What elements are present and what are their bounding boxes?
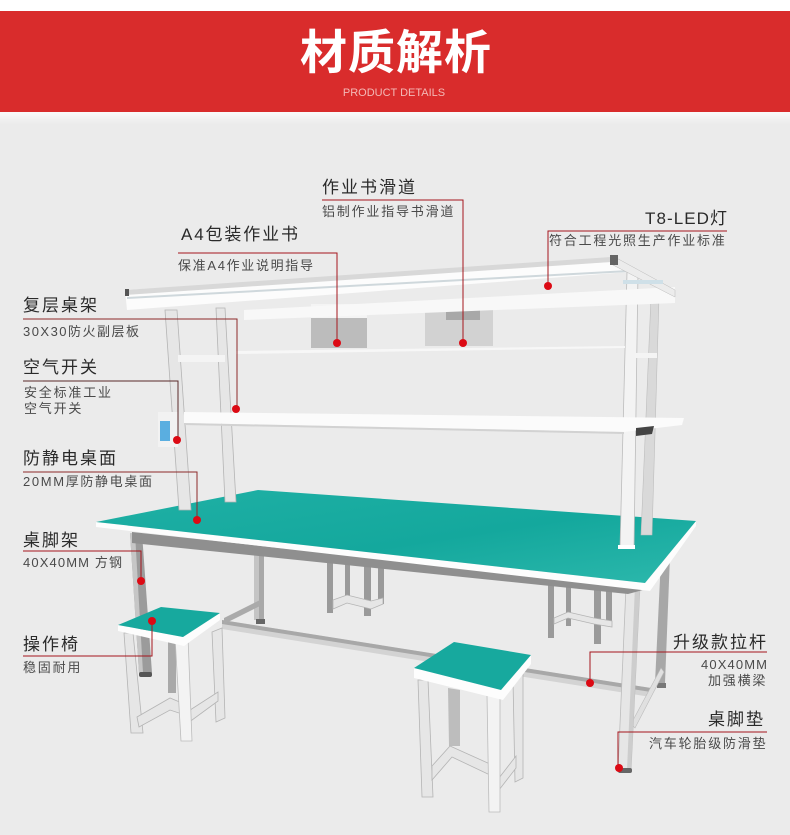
- callout: 防静电桌面: 20MM厚防静电桌面: [23, 474, 152, 489]
- left operator stool: [118, 607, 225, 741]
- callout: 操作椅: [23, 617, 156, 675]
- table front right leg: [618, 586, 640, 773]
- callout: T8-LED灯: [544, 209, 727, 290]
- workbench illustration: [96, 255, 696, 812]
- callout: 操作椅: 操作椅: [23, 635, 80, 654]
- table rear legs: [254, 552, 670, 688]
- callout: 复层桌架: 30X30防火副层板: [23, 324, 139, 339]
- air switch box: [158, 412, 178, 447]
- table front left leg: [130, 533, 152, 677]
- callout: T8-LED灯: 符合工程光照生产作业标准: [549, 233, 727, 248]
- lamp and overhead shelf: [125, 255, 675, 320]
- callout: 空气开关: [23, 358, 181, 444]
- callout: 升级款拉杆: 升级款拉杆: [673, 633, 768, 652]
- subtitle: PRODUCT DETAILS: [343, 87, 445, 99]
- callout: 操作椅: 稳固耐用: [23, 660, 82, 675]
- callout: 桌脚垫: 汽车轮胎级防滑垫: [649, 736, 767, 751]
- callout: 升级款拉杆: 加强横梁: [708, 673, 767, 688]
- background stool, right: [548, 583, 612, 644]
- callout: 空气开关: 空气开关: [24, 401, 83, 416]
- callout: 桌脚垫: 桌脚垫: [708, 710, 765, 729]
- upper thin shelf: [178, 346, 657, 362]
- document holders: [311, 304, 493, 348]
- callout: 升级款拉杆: [586, 633, 768, 688]
- header banner: [0, 11, 790, 112]
- callout: 桌脚架: [23, 531, 145, 585]
- under-table beam: [132, 532, 650, 594]
- long stretcher: [222, 600, 664, 728]
- title: 材质解析: [300, 26, 492, 79]
- callout: A4包装作业书: [178, 225, 341, 347]
- callout: 作业书滑道: 铝制作业指导书滑道: [322, 204, 455, 219]
- callout: 防静电桌面: 防静电桌面: [23, 449, 118, 468]
- callout: A4包装作业书: 保准A4作业说明指导: [178, 258, 313, 273]
- callout: T8-LED灯: T8-LED灯: [645, 209, 727, 228]
- callout: 桌脚架: 桌脚架: [23, 531, 80, 550]
- shelf uprights: [165, 272, 659, 549]
- callout: 作业书滑道: [322, 178, 467, 347]
- front operator stool: [414, 642, 531, 812]
- callout: 空气开关: 安全标准工业: [24, 385, 113, 400]
- lower shelf: [184, 412, 684, 436]
- callout: 防静电桌面: [23, 449, 201, 524]
- callout: 作业书滑道: 作业书滑道: [322, 178, 417, 197]
- background stool, centre: [327, 558, 384, 616]
- table top: [96, 490, 696, 591]
- callout: 升级款拉杆: 40X40MM: [701, 657, 767, 672]
- callout: 空气开关: 空气开关: [23, 358, 99, 377]
- callout: 复层桌架: 复层桌架: [23, 296, 99, 315]
- callout: 桌脚架: 40X40MM 方钢: [23, 555, 122, 570]
- callout: 桌脚垫: [615, 710, 767, 772]
- callout: 复层桌架: [23, 296, 240, 413]
- callout: A4包装作业书: A4包装作业书: [181, 225, 298, 244]
